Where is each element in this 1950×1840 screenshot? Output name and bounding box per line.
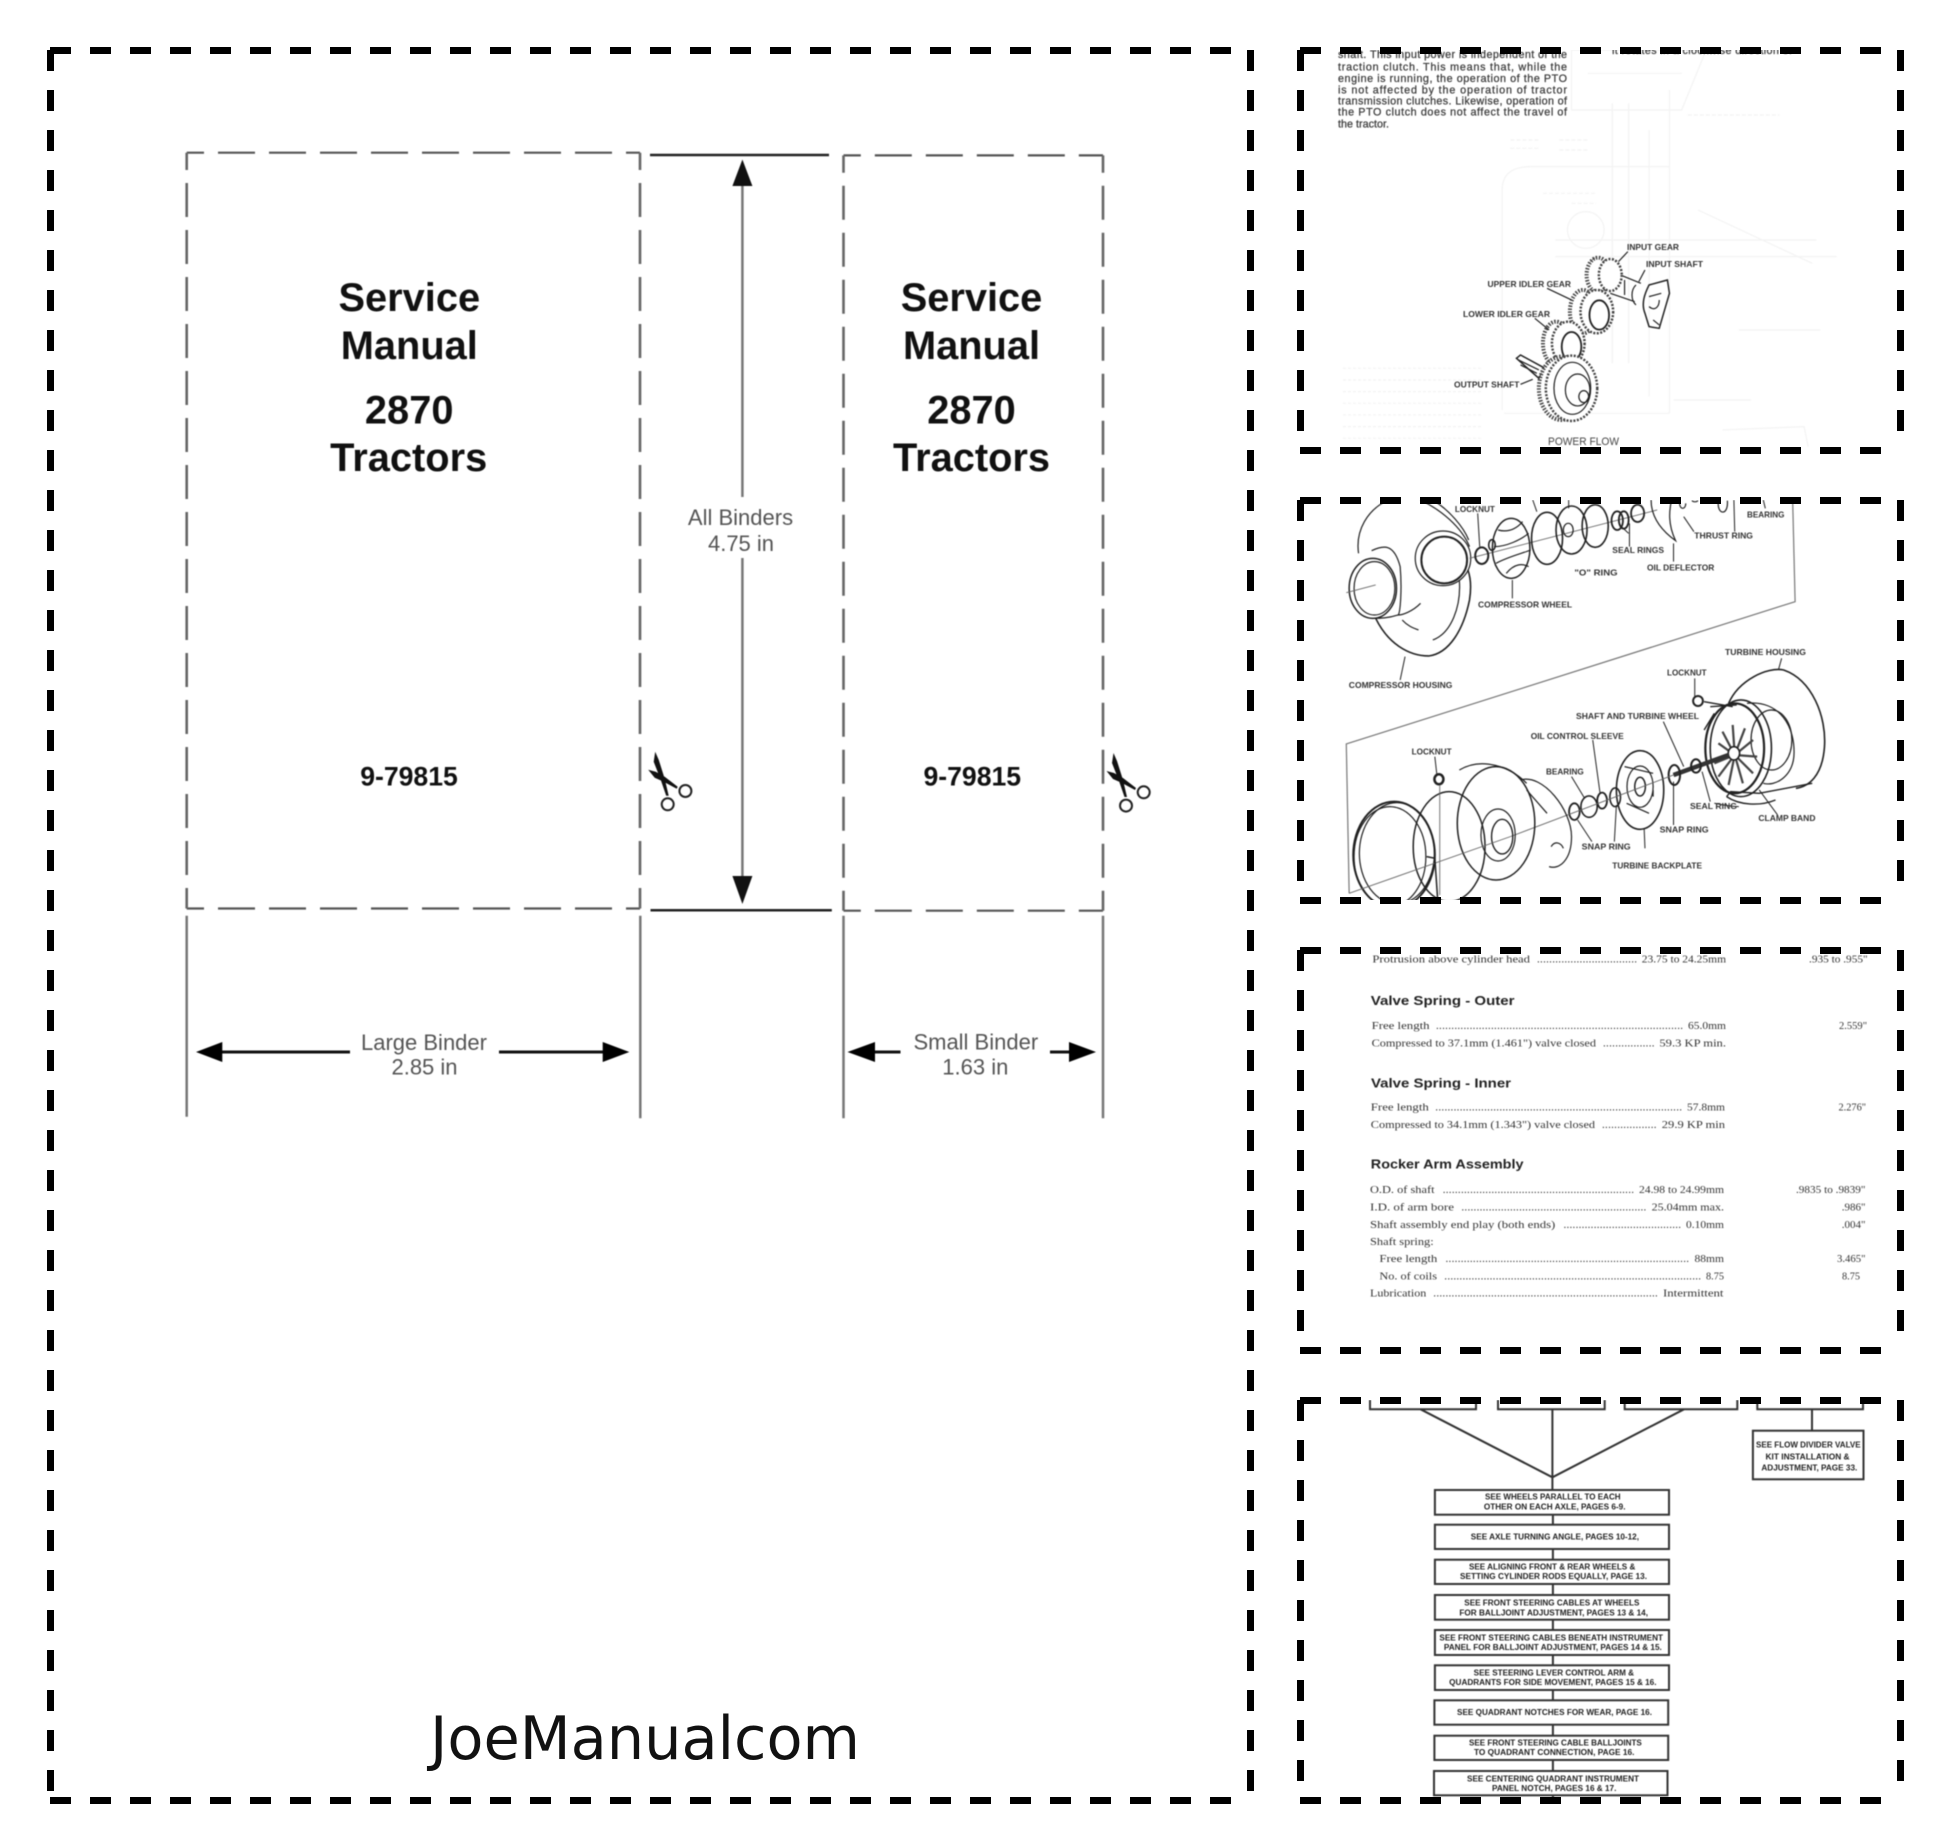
arrow: all binders height: [732, 160, 752, 904]
row: protrusion: [1372, 954, 1868, 966]
part labels: BEARING: [1747, 509, 1785, 519]
large binder spine text: Service: [338, 276, 480, 320]
heading: rocker arm assembly: Rocker Arm Assembly: [1371, 1156, 1524, 1171]
rows: rocker arm assembly: ................................................................................: [1446, 1253, 1689, 1265]
flow box: quadrant notches: [1434, 1700, 1668, 1725]
flow box: centering quadrant: SEE CENTERING QUADRANT INSTRUMENT: [1467, 1774, 1639, 1783]
small binder spine text: [893, 276, 1050, 792]
label: large binder: Large Binder: [361, 1030, 487, 1055]
flow box: axle turning angle: [1435, 1525, 1669, 1549]
flow box: cables beneath panel: [1435, 1630, 1669, 1655]
rows: valve spring outer: 65.0mm: [1688, 1020, 1726, 1032]
panel border: turbocharger: [1300, 500, 1900, 900]
gear labels: OUTPUT SHAFT: [1454, 380, 1520, 390]
flow box: cables beneath panel: SEE FRONT STEERING CABLES BENEATH INSTRUMENT: [1439, 1634, 1663, 1643]
arrow: small binder width: [848, 1042, 1096, 1062]
text block: PTO description: it rotates in a clockwise direction of: [1612, 45, 1793, 57]
part labels: "O" RING: [1574, 567, 1618, 577]
part labels: THRUST RING: [1694, 530, 1753, 540]
rows: valve spring outer: [1372, 1020, 1867, 1050]
flow box: flow divider valve: SEE FLOW DIVIDER VALVE: [1756, 1440, 1861, 1449]
turbine housing and wheel: [1669, 669, 1825, 804]
text block: PTO description: the tractor.: [1338, 119, 1389, 131]
row: protrusion: .................................: [1537, 954, 1637, 966]
part labels: [1349, 504, 1816, 871]
rows: valve spring inner: 57.8mm: [1687, 1102, 1725, 1114]
gear labels: INPUT SHAFT: [1646, 259, 1704, 269]
ghost show-through drawing: [1343, 50, 1837, 447]
rows: valve spring inner: [1371, 1102, 1866, 1131]
rows: valve spring inner: 2.276": [1838, 1102, 1866, 1114]
large binder spine text: Manual: [341, 324, 478, 368]
page scan: specifications: [1370, 954, 1868, 1300]
part labels: OIL DEFLECTOR: [1647, 562, 1714, 572]
small binder dashed cut box: [844, 155, 1103, 911]
text block: PTO description: shaft. This input power is independent of the: [1338, 49, 1567, 61]
flow box: wheels parallel: [1435, 1490, 1669, 1515]
text block: PTO description: traction clutch. This means that, while the: [1338, 62, 1567, 74]
part labels: LOCKNUT: [1455, 504, 1496, 514]
flow box: aligning wheels: SETTING CYLINDER RODS EQUALLY, PAGE 13.: [1460, 1572, 1647, 1581]
large binder dashed cut box: [187, 153, 640, 908]
small binder spine text: 2870: [927, 388, 1016, 432]
rows: rocker arm assembly: Shaft assembly end play (both ends): [1370, 1219, 1556, 1231]
lower leader lines: [1435, 658, 1782, 848]
heading: valve spring inner: Valve Spring - Inner: [1371, 1075, 1511, 1090]
gear labels: UPPER IDLER GEAR: [1488, 279, 1571, 289]
rows: valve spring outer: .................................................................................: [1436, 1020, 1683, 1032]
rows: rocker arm assembly: Shaft spring:: [1370, 1236, 1434, 1248]
row: protrusion: Protrusion above cylinder head: [1372, 954, 1531, 966]
flow box: quadrant notches: SEE QUADRANT NOTCHES FOR WEAR, PAGE 16.: [1457, 1708, 1652, 1717]
flow box: steering lever: QUADRANTS FOR SIDE MOVEMENT, PAGES 15 & 16.: [1449, 1678, 1656, 1687]
flowchart connectors: [1370, 1400, 1863, 1800]
label: small binder: [913, 1029, 1038, 1079]
text block: PTO description: transmission clutches. Likewise, operation of: [1338, 96, 1568, 108]
rows: valve spring inner: ..................: [1602, 1119, 1657, 1131]
panel: binder spine label template: [50, 50, 1250, 1800]
brand wordmark: JoeManualcom: [426, 1704, 860, 1774]
diagram: gear train: [1516, 252, 1669, 421]
rows: rocker arm assembly: Intermittent: [1663, 1288, 1724, 1300]
panel border: flowchart: [1300, 1400, 1900, 1800]
large binder spine text: 2870: [365, 388, 453, 432]
text block: PTO description: [1338, 45, 1793, 131]
rows: rocker arm assembly: 88mm: [1694, 1253, 1724, 1265]
rows: rocker arm assembly: 0.10mm: [1686, 1219, 1724, 1231]
flow box: cable balljoints: [1434, 1736, 1668, 1760]
binder diagram: [187, 153, 1150, 1118]
backplate and sleeve: [1510, 751, 1674, 837]
flow box: steering lever: SEE STEERING LEVER CONTROL ARM &: [1474, 1669, 1634, 1678]
rows: rocker arm assembly: 8.75: [1706, 1270, 1724, 1282]
small binder spine text: Service: [901, 276, 1042, 320]
rows: valve spring outer: 2.559": [1839, 1020, 1867, 1032]
compressor housing: [1346, 500, 1657, 656]
panel: turbocharger exploded view: [1300, 500, 1900, 908]
panel border: specifications: [1300, 950, 1900, 1350]
row: protrusion: 23.75 to 24.25mm: [1642, 954, 1726, 966]
rows: rocker arm assembly: ..........................................................................: [1433, 1288, 1658, 1300]
flow box: aligning wheels: SEE ALIGNING FRONT & REAR WHEELS &: [1469, 1562, 1636, 1571]
page scan: power flow: [1338, 45, 1837, 448]
label: all binders: 4.75 in: [708, 531, 774, 556]
flow box: cables beneath panel: PANEL FOR BALLJOINT ADJUSTMENT, PAGES 14 & 15.: [1444, 1643, 1662, 1652]
small binder spine text: Manual: [903, 324, 1040, 368]
gear labels: INPUT GEAR: [1627, 242, 1679, 252]
part labels: SNAP RING: [1582, 841, 1631, 851]
flow box: cable balljoints: TO QUADRANT CONNECTION, PAGE 16.: [1474, 1748, 1634, 1757]
label: small binder: 1.63 in: [942, 1054, 1008, 1079]
part labels: OIL CONTROL SLEEVE: [1531, 731, 1624, 741]
width guide lines: [187, 916, 1103, 1118]
part labels: COMPRESSOR HOUSING: [1349, 680, 1453, 690]
small binder spine text: 9-79815: [923, 762, 1021, 792]
flow box: cables at wheels: [1435, 1595, 1669, 1620]
caption: power flow: POWER FLOW: [1548, 436, 1620, 448]
flow box: flow divider valve: ADJUSTMENT, PAGE 33.: [1761, 1464, 1857, 1473]
flow box: wheels parallel: SEE WHEELS PARALLEL TO EACH: [1485, 1493, 1621, 1502]
rows: rocker arm assembly: 25.04mm max.: [1652, 1202, 1724, 1214]
heading: valve spring outer: Valve Spring - Outer: [1371, 993, 1514, 1008]
rows: valve spring outer: Compressed to 37.1mm (1.461") valve closed: [1372, 1038, 1597, 1050]
gear labels: [1454, 242, 1704, 390]
flow box: flow divider valve: [1753, 1431, 1864, 1479]
rows: rocker arm assembly: [1370, 1184, 1866, 1300]
rows: rocker arm assembly: 8.75: [1842, 1270, 1860, 1282]
part labels: LOCKNUT: [1667, 667, 1707, 677]
part labels: SEAL RING: [1690, 801, 1737, 811]
part labels: BEARING: [1546, 767, 1584, 777]
rows: rocker arm assembly: .............................................................: [1461, 1202, 1647, 1214]
large binder spine text: 9-79815: [360, 762, 458, 792]
rows: rocker arm assembly: I.D. of arm bore: [1370, 1202, 1454, 1214]
part labels: SEAL RINGS: [1612, 545, 1664, 555]
rows: rocker arm assembly: .....................................................................................: [1444, 1270, 1701, 1282]
rows: rocker arm assembly: .9835 to .9839": [1796, 1184, 1866, 1196]
part labels: TURBINE BACKPLATE: [1612, 861, 1702, 871]
text block: PTO description: is not affected by the operation of tractor: [1338, 84, 1567, 96]
icon: scissors small binder: [1106, 753, 1150, 812]
label: large binder: [361, 1030, 487, 1079]
height guide lines: [650, 155, 832, 910]
rows: rocker arm assembly: No. of coils: [1379, 1270, 1437, 1282]
large binder spine text: Tractors: [330, 436, 487, 480]
flow box: cables at wheels: SEE FRONT STEERING CABLES AT WHEELS: [1464, 1599, 1640, 1608]
rows: rocker arm assembly: 24.98 to 24.99mm: [1639, 1184, 1724, 1196]
small binder spine text: Tractors: [893, 436, 1050, 480]
part labels: COMPRESSOR WHEEL: [1478, 600, 1572, 610]
flow box: cables at wheels: FOR BALLJOINT ADJUSTMENT, PAGES 13 & 14,: [1459, 1608, 1648, 1617]
panel: valve specifications table: [1300, 950, 1900, 1350]
row: protrusion: .935 to .955": [1809, 954, 1868, 966]
part labels: TURBINE HOUSING: [1725, 647, 1806, 657]
rows: valve spring inner: 29.9 KP min: [1662, 1119, 1726, 1131]
arrow: large binder width: [196, 1042, 629, 1062]
page scan: turbocharger: [1346, 500, 1825, 908]
flow box: wheels parallel: OTHER ON EACH AXLE, PAGES 6-9.: [1484, 1503, 1626, 1512]
panel: steering troubleshooting flowchart: [1300, 1400, 1900, 1800]
large binder spine text: [330, 276, 487, 792]
panel: PTO power flow page: [1300, 45, 1900, 450]
rows: rocker arm assembly: .004": [1842, 1219, 1866, 1231]
label: all binders: All Binders: [688, 505, 793, 530]
rows: rocker arm assembly: Lubrication: [1370, 1288, 1427, 1300]
part labels: LOCKNUT: [1412, 747, 1452, 757]
rows: valve spring outer: 59.3 KP min.: [1659, 1038, 1726, 1050]
gear labels: LOWER IDLER GEAR: [1463, 309, 1550, 319]
rows: valve spring outer: .................: [1603, 1038, 1655, 1050]
flow box: centering quadrant: [1434, 1771, 1668, 1795]
flow box: aligning wheels: [1435, 1560, 1669, 1584]
compressor wheel and rings: [1475, 500, 1727, 578]
part labels: SNAP RING: [1660, 825, 1709, 835]
upper leader lines: [1400, 500, 1765, 680]
rows: valve spring inner: Compressed to 34.1mm (1.343") valve closed: [1371, 1119, 1596, 1131]
rows: rocker arm assembly: .......................................: [1564, 1219, 1681, 1231]
rows: rocker arm assembly: O.D. of shaft: [1370, 1184, 1434, 1196]
rows: rocker arm assembly: Free length: [1379, 1253, 1438, 1265]
icon: scissors large binder: [648, 752, 691, 810]
label: large binder: 2.85 in: [391, 1054, 458, 1079]
rows: valve spring inner: Free length: [1371, 1102, 1429, 1114]
flow box: cable balljoints: SEE FRONT STEERING CABLE BALLJOINTS: [1469, 1738, 1642, 1747]
flow box: centering quadrant: PANEL NOTCH, PAGES 16 & 17.: [1492, 1784, 1616, 1793]
flow box: flow divider valve: KIT INSTALLATION &: [1766, 1452, 1850, 1461]
rows: valve spring outer: Free length: [1372, 1020, 1430, 1032]
center housing and rings: [1349, 764, 1572, 908]
rows: rocker arm assembly: .986": [1842, 1202, 1866, 1214]
frame line: [1346, 500, 1795, 893]
flow box: axle turning angle: SEE AXLE TURNING ANGLE, PAGES 10-12,: [1471, 1533, 1639, 1542]
diagram: turbocharger parts: [1346, 500, 1825, 908]
flow box: steering lever: [1435, 1665, 1669, 1690]
panel border: power flow: [1300, 50, 1900, 450]
part labels: CLAMP BAND: [1758, 813, 1816, 823]
rows: valve spring inner: .................................................................................: [1435, 1102, 1682, 1114]
rows: rocker arm assembly: ...............................................................: [1443, 1184, 1634, 1196]
page scan: flowchart: [1370, 1400, 1864, 1800]
text block: PTO description: the PTO clutch does not affect the travel of: [1338, 107, 1568, 119]
rows: rocker arm assembly: 3.465": [1837, 1253, 1866, 1265]
label: all binders: [688, 505, 793, 556]
label: small binder: Small Binder: [913, 1029, 1038, 1054]
text block: PTO description: engine is running, the operation of the PTO: [1338, 73, 1567, 85]
part labels: SHAFT AND TURBINE WHEEL: [1576, 711, 1699, 721]
panel border: main: [50, 50, 1250, 1800]
